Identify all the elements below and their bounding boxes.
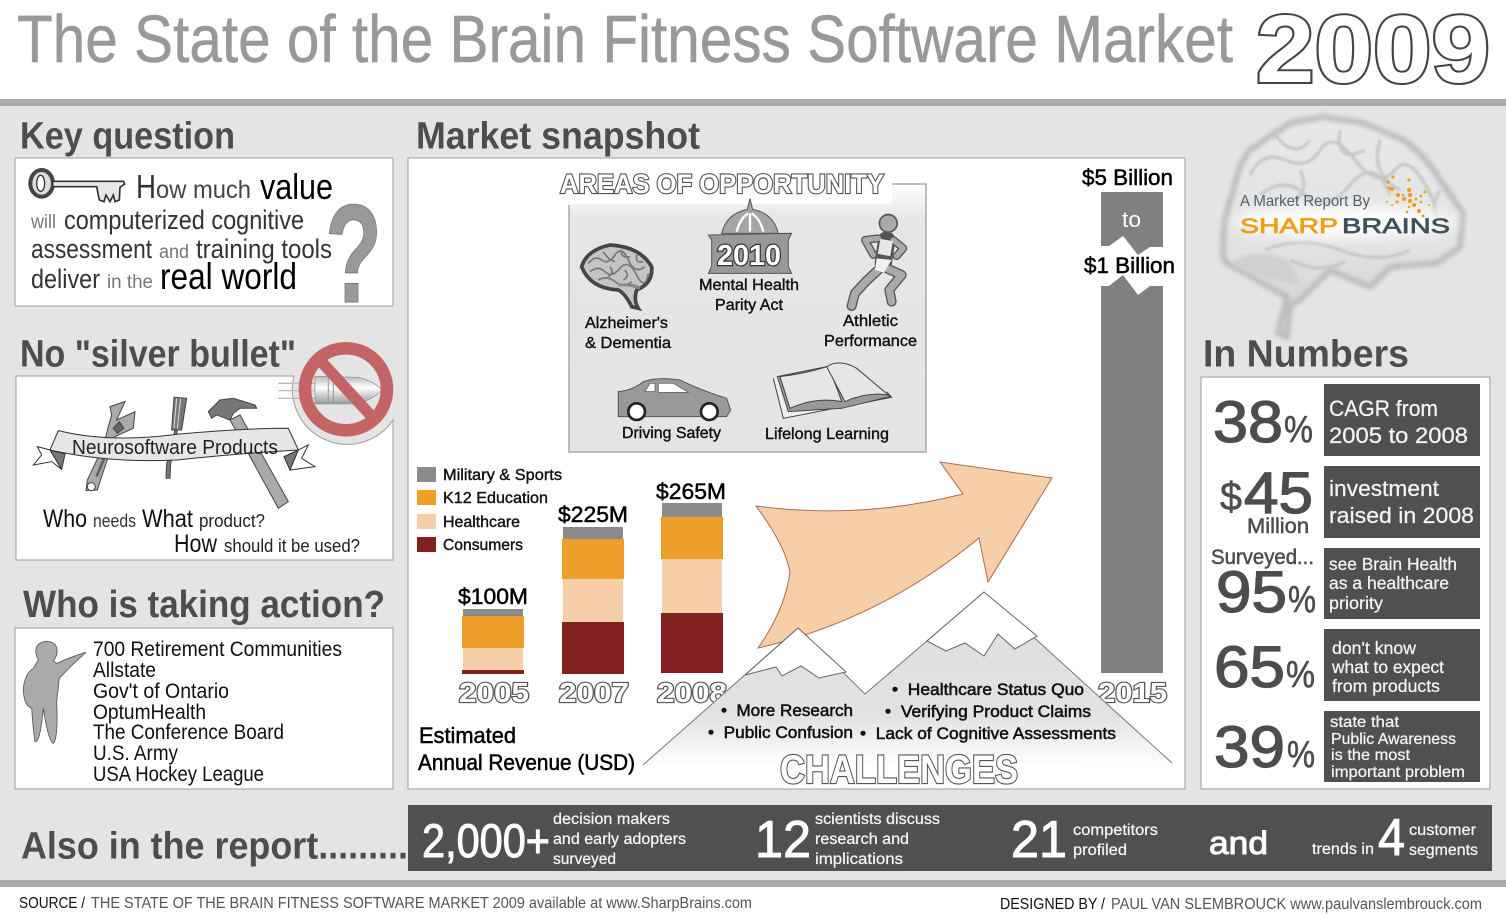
bar: 2007: 2007 <box>559 677 629 708</box>
text: key question: value <box>260 166 333 207</box>
bar: 2005 <box>458 584 529 708</box>
labels: areas: Driving Safety <box>622 425 721 442</box>
stat: 65%: from products <box>1332 676 1440 696</box>
bar: 2015 <box>1082 165 1175 708</box>
labels: areas: Parity Act <box>715 297 784 314</box>
item: 4 customer segments <box>1312 809 1478 867</box>
item: 4 customer segments: segments <box>1409 842 1478 859</box>
list: organizations: USA Hockey League <box>93 763 264 786</box>
stat: surveyed 95%: as a healthcare <box>1329 573 1449 593</box>
stat: 65%: what to expect <box>1331 657 1444 677</box>
panel: who is taking action <box>15 628 393 789</box>
text: key question: assessment <box>31 234 152 264</box>
item: 4 customer segments: 4 <box>1378 809 1405 867</box>
labels: areas <box>585 277 917 443</box>
item: 21 competitors: profiled <box>1073 842 1127 859</box>
icon: car <box>618 379 731 420</box>
item: 12 scientists: scientists discuss <box>815 811 940 828</box>
banner label: Neurosoftware Products <box>72 437 278 459</box>
stat: surveyed 95%: 95 <box>1216 560 1287 625</box>
stat: 65% <box>1214 629 1480 701</box>
list: organizations: The Conference Board <box>93 721 284 744</box>
item: 4 customer segments: trends in <box>1312 841 1374 858</box>
icon: no silver bullet sign <box>278 348 387 430</box>
chart caption: Estimated <box>419 723 516 748</box>
item: 21 competitors: competitors <box>1073 822 1158 839</box>
list: challenges: • Public Confusion <box>708 723 853 742</box>
heading: no silver bullet: No "silver bullet" <box>20 334 296 376</box>
item: 2,000+: and early adopters <box>553 831 686 848</box>
text: who needs what <box>43 505 360 558</box>
heading: also in the report: Also in the report......... <box>21 826 408 868</box>
list: challenges: • Lack of Cognitive Assessments <box>860 724 1116 743</box>
bar: 2007 <box>558 502 629 708</box>
stat: surveyed 95%: % <box>1288 579 1316 621</box>
icon: pointing person <box>23 641 86 743</box>
stat: 38% <box>1213 384 1480 456</box>
labels: areas: Alzheimer's <box>585 315 668 332</box>
panel: key question <box>15 158 393 332</box>
text: key question: deliver <box>31 264 100 294</box>
stat: 39%: % <box>1287 734 1315 776</box>
stat: 65%: don't know <box>1332 638 1416 658</box>
brain with logo: SHARP <box>1240 215 1338 238</box>
logo: dots <box>1386 176 1430 218</box>
panel: no silver bullet <box>16 348 393 560</box>
list: organizations <box>93 638 342 786</box>
labels: areas: Mental Health <box>699 277 799 294</box>
stat: surveyed 95% <box>1211 546 1480 625</box>
text: key question: will <box>30 212 56 233</box>
stat: surveyed 95%: priority <box>1329 593 1383 613</box>
bar: 2005: 2005 <box>459 677 529 708</box>
legend: Consumers <box>443 537 523 554</box>
legend <box>417 467 562 554</box>
chart caption <box>418 723 635 775</box>
stat: 39%: Public Awareness <box>1331 731 1456 748</box>
stat: 38%: % <box>1284 409 1313 451</box>
item: 4 customer segments: customer <box>1409 822 1476 839</box>
stat: $45 million: investment <box>1329 476 1440 501</box>
logo text: A Market Report By <box>1240 193 1370 210</box>
legend: Military & Sports <box>443 467 562 484</box>
labels: areas: & Dementia <box>585 335 671 352</box>
heading: challenges: CHALLENGES <box>780 748 1018 792</box>
labels: areas: Performance <box>824 333 917 350</box>
stat: surveyed 95%: Surveyed... <box>1211 546 1314 569</box>
icon: brain <box>582 245 652 308</box>
item: and: and <box>1209 825 1268 861</box>
item: 2,000+ <box>422 811 686 868</box>
header band <box>0 0 1506 106</box>
stat: $45 million: raised in 2008 <box>1329 503 1474 528</box>
bar: 2008: 2008 <box>657 677 727 708</box>
bar: also in the report <box>408 805 1492 871</box>
list: organizations: 700 Retirement Communities <box>93 638 342 661</box>
item: 21 competitors: 21 <box>1011 811 1067 869</box>
list: organizations: OptumHealth <box>93 701 206 724</box>
list: organizations: Allstate <box>93 659 156 682</box>
list: challenges: • Healthcare Status Quo <box>892 680 1084 699</box>
footer: source: THE STATE OF THE BRAIN FITNESS SOFTWARE MARKET 2009 available at www.SharpBrains.com <box>91 895 752 912</box>
brain with logo <box>1223 117 1463 337</box>
heading: who is taking action: Who is taking action? <box>23 584 385 626</box>
stat: 65%: 65 <box>1214 635 1285 700</box>
stat: 38%: 2005 to 2008 <box>1329 423 1468 448</box>
icon: key <box>30 170 125 202</box>
legend: K12 Education <box>443 490 548 507</box>
heading: areas of opportunity: AREAS OF OPPORTUNITY <box>560 169 884 199</box>
labels: areas: Lifelong Learning <box>765 426 889 443</box>
stat: surveyed 95%: see Brain Health <box>1329 554 1457 574</box>
heading: in numbers: In Numbers <box>1203 334 1409 376</box>
item: 2,000+: 2,000+ <box>422 814 550 867</box>
heading: key question: Key question <box>20 116 235 158</box>
stat: $45 million: Million <box>1247 515 1309 538</box>
text: key question <box>30 166 333 297</box>
list: challenges: • More Research <box>721 701 853 720</box>
arrow: growth <box>756 462 1052 648</box>
bar: 2007: $225M <box>558 502 628 527</box>
footer band <box>0 880 1506 917</box>
text: who needs what: needs <box>93 511 136 531</box>
stat: 39% <box>1214 711 1480 782</box>
stat: 39%: is the most <box>1331 747 1411 764</box>
text: who needs what: How <box>174 530 218 558</box>
bar: 2015: $1 Billion <box>1084 253 1175 278</box>
stat: 39%: state that <box>1330 714 1400 731</box>
text: who needs what: Who <box>43 505 87 533</box>
stat: 38%: 38 <box>1213 390 1283 455</box>
list: organizations: Gov't of Ontario <box>93 680 229 703</box>
labels: areas: Athletic <box>843 313 898 330</box>
brain with logo: BRAINS <box>1342 215 1450 238</box>
panel: market snapshot <box>408 158 1185 792</box>
icon: book <box>773 363 892 418</box>
text: key question: and <box>159 242 189 263</box>
ribbon banner <box>33 428 315 470</box>
icon: tools <box>86 397 288 508</box>
stat: $45 million: $ <box>1220 475 1242 519</box>
text: key question: training tools <box>196 234 332 264</box>
list: challenges: • Verifying Product Claims <box>885 702 1091 721</box>
footer: source: SOURCE / <box>19 895 86 912</box>
stat: $45 million <box>1220 461 1480 538</box>
stat: 39%: 39 <box>1214 715 1285 780</box>
bar chart: revenue <box>458 165 1175 708</box>
text: who needs what: product? <box>199 511 265 531</box>
text: key question: real world <box>160 256 297 297</box>
panel: areas of opportunity <box>556 166 926 452</box>
item: 12 scientists: 12 <box>755 811 811 869</box>
chart caption: Annual Revenue (USD) <box>418 750 635 775</box>
heading: market snapshot: Market snapshot <box>416 116 700 158</box>
text: who needs what: should it be used? <box>224 536 360 556</box>
icon: capitol building <box>708 198 792 273</box>
panel: in numbers <box>1201 377 1490 789</box>
list: challenges <box>708 680 1116 743</box>
icon: question mark: ? <box>325 175 382 332</box>
item: 12 scientists: implications <box>815 851 903 868</box>
title: The State of the Brain Fitness Software Market <box>17 2 1233 77</box>
bar: 2015: 2015 <box>1098 677 1167 708</box>
stat: 38%: CAGR from <box>1329 396 1438 421</box>
label: 2010: 2010 <box>717 240 781 272</box>
text: who needs what: What <box>142 505 193 533</box>
item: 2,000+: decision makers <box>553 811 670 828</box>
bar: 2008: $265M <box>656 479 726 504</box>
item: 2,000+: surveyed <box>553 851 616 868</box>
bar: 2005: $100M <box>458 584 528 609</box>
legend: Healthcare <box>443 514 520 531</box>
text: key question: in the <box>107 272 153 293</box>
stat: $45 million: 45 <box>1244 461 1313 526</box>
item: 12 scientists <box>755 811 940 869</box>
footer: designer: PAUL VAN SLEMBROUCK www.paulvanslembrouck.com <box>1111 896 1482 913</box>
list: organizations: U.S. Army <box>93 742 178 765</box>
footer: designer: DESIGNED BY / <box>1000 896 1106 913</box>
bar: 2008 <box>656 479 727 708</box>
bar: 2015: to <box>1122 207 1141 232</box>
item: 12 scientists: research and <box>815 831 909 848</box>
item: 21 competitors <box>1011 811 1158 869</box>
icon: runner <box>852 215 903 306</box>
bar: 2015: $5 Billion <box>1082 165 1173 190</box>
text: key question: H <box>136 168 156 205</box>
stat: 65%: % <box>1286 654 1315 696</box>
text: key question: ow much <box>156 176 251 204</box>
stat: 39%: important problem <box>1331 764 1465 781</box>
mountains: challenges <box>643 592 1172 792</box>
text: key question: computerized cognitive <box>64 205 304 235</box>
